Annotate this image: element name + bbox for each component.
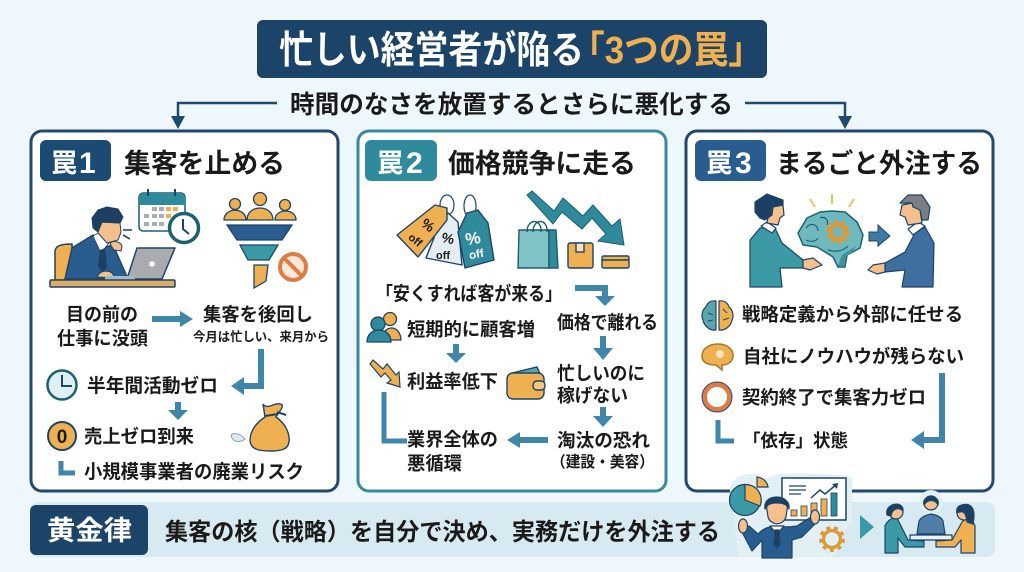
text: absorbed in work: [57, 304, 148, 349]
text: postpone customer acquisition: 今月は忙しい、来月から: [193, 329, 329, 344]
badge: trap 3: [695, 140, 766, 181]
title banner: 忙しい経営者が陥る: [279, 30, 584, 72]
badge: trap 2: 2: [406, 147, 423, 180]
text: zero acquisition after contract: 契約終了で集客力ゼロ: [742, 387, 926, 408]
icon: prohibited sign: [280, 254, 306, 280]
text: postpone customer acquisition: 集客を後回し: [203, 304, 313, 325]
text: cheap brings customers: 「安くすれば客が来る」: [376, 282, 562, 305]
arrow: work to postpone: [152, 311, 193, 327]
panel: trap 1: [31, 131, 338, 491]
icon: pie chart: [730, 477, 768, 516]
icon: halo behind presenter: [730, 473, 852, 557]
heading: trap 1: 集客を止める: [124, 149, 285, 179]
icon: customers: [367, 312, 401, 342]
arrow: subtitle to trap 3: [745, 103, 852, 129]
text: absorbed in work: 仕事に没頭: [57, 328, 148, 349]
connector: to dependency: [718, 420, 734, 441]
icon: chart board: [782, 478, 846, 520]
badge: golden rule: 黄金律: [47, 516, 132, 546]
text: short term customer increase: 短期的に顧客増: [407, 319, 535, 340]
text: no know-how remains: 自社にノウハウが残らない: [743, 346, 964, 367]
icon: discount tags: [397, 195, 494, 268]
title banner: [257, 20, 767, 78]
icon: zero ring: [702, 382, 732, 412]
icon: wallet: [507, 367, 545, 399]
icon: halo behind team: [919, 490, 943, 514]
text: industry-wide vicious circle: [407, 429, 498, 474]
icon: discount tags: %: [418, 215, 438, 236]
badge: golden rule: [30, 505, 148, 555]
arrow: to team: [860, 515, 874, 539]
icon: shopping bag: [518, 222, 558, 268]
text: fear of elimination: [551, 430, 654, 471]
heading: trap 3: まるごと外注する: [776, 148, 982, 179]
badge: trap 1: [40, 140, 111, 181]
text: half year no activity: 半年間活動ゼロ: [87, 374, 218, 397]
icon: zero coin: [48, 422, 76, 450]
icon: discount tags: off: [436, 250, 450, 262]
text: absorbed in work: 目の前の: [66, 304, 138, 325]
subtitle: 時間のなさを放置するとさらに悪化する: [290, 91, 733, 119]
text: busy but not earning: 忙しいのに: [557, 363, 645, 384]
panel: golden rule: [30, 473, 995, 558]
badge: trap 1: 罠: [51, 148, 77, 178]
heading: trap 2: 価格競争に走る: [448, 149, 636, 179]
icon: man receiving, right: [868, 195, 934, 287]
icon: split brain: [702, 301, 733, 330]
arrow: to margin drop: [446, 344, 466, 363]
icon: box: [568, 243, 593, 268]
icon: man handing over, left: [750, 194, 822, 287]
text: zero sales: 売上ゼロ到来: [84, 426, 194, 447]
badge: trap 3: 3: [735, 147, 752, 180]
icon: card: [602, 256, 629, 268]
icon: zigzag down arrow: [370, 360, 400, 387]
text: busy but not earning: [557, 363, 645, 406]
connector: to closure risk: [61, 461, 75, 473]
badge: trap 2: 罠: [377, 148, 403, 178]
icon: funnel with customers: [224, 192, 296, 288]
icon: man at laptop: [50, 207, 175, 287]
text: margin drop: 利益率低下: [407, 371, 498, 392]
arrow: handover: [869, 225, 890, 246]
arrow: to leaving on price: [575, 288, 615, 306]
text: golden rule statement: 集客の核（戦略）を自分で決め、実務だけを外注する: [165, 519, 720, 546]
icon: gear: [820, 528, 844, 550]
text: busy but not earning: 稼げない: [557, 385, 628, 406]
icon: orange brain: [702, 344, 733, 370]
text: fear of elimination: （建設・美容）: [551, 453, 654, 471]
panel: trap 2: [358, 131, 666, 491]
icon: zero coin: 0: [57, 427, 67, 448]
icon: presenter: [738, 497, 820, 558]
text: industry-wide vicious circle: 業界全体の: [407, 429, 498, 450]
text: closure risk: 小規模事業者の廃業リスク: [84, 460, 304, 483]
text: dependency state: 「依存」状態: [743, 430, 848, 451]
title banner: 「3つの罠」: [570, 30, 763, 72]
arrow: subtitle to trap 1: [171, 103, 277, 129]
text: outsource from strategy definition: 戦略定義から外部に任せる: [742, 304, 963, 325]
arrow: down to zero sales: [168, 402, 188, 420]
arrow: to elimination: [593, 407, 613, 427]
icon: team meeting: [885, 496, 975, 553]
text: fear of elimination: 淘汰の恐れ: [557, 430, 650, 451]
icon: discount tags: %: [464, 228, 482, 249]
icon: falling price arrow: [527, 191, 624, 245]
panel: trap 3: [686, 131, 993, 491]
badge: trap 2: [365, 140, 437, 181]
arrow: to dependency: [911, 373, 942, 449]
arrow: to not earning: [593, 336, 613, 360]
text: postpone customer acquisition: [193, 304, 329, 344]
arrow: postpone to half year: [231, 349, 261, 395]
icon: calendar and clock: [139, 189, 198, 242]
text: leaving on price: 価格で離れる: [557, 312, 658, 333]
icon: discount tags: %: [440, 229, 456, 247]
badge: trap 3: 罠: [706, 148, 732, 178]
icon: discount tags: off: [468, 248, 485, 262]
arrow: elimination to vicious circle: [507, 432, 548, 448]
icon: discount tags: off: [406, 232, 424, 250]
text: industry-wide vicious circle: 悪循環: [407, 453, 462, 474]
connector: margin drop to vicious circle: [384, 392, 407, 441]
icon: clock: [48, 370, 76, 400]
badge: trap 1: 1: [79, 147, 96, 180]
icon: money bag: [231, 404, 289, 451]
icon: brain with gear: [798, 194, 863, 267]
